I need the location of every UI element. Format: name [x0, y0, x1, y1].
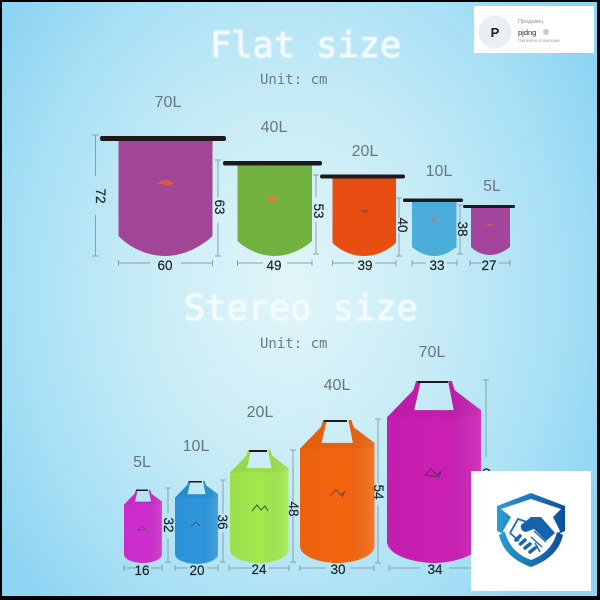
- title: stereo size: Stereo size: [184, 288, 418, 329]
- flat bag 40L: 40L: [261, 119, 287, 136]
- flat bag 10L: 10L: [426, 163, 452, 180]
- flat bag 5L: [455, 178, 515, 273]
- flat bag 10L: [395, 163, 463, 273]
- stereo bag 10L: 36: [215, 514, 230, 530]
- flat bag 10L: 33: [429, 258, 445, 273]
- flat bag 20L: 39: [357, 258, 373, 273]
- stereo bag 5L: 5L: [133, 454, 151, 471]
- badge avatar: P: [491, 25, 500, 40]
- badge text: Продавец: [518, 19, 544, 25]
- flat bag 70L: 70L: [155, 94, 181, 111]
- unit: flat: Unit: cm: [260, 72, 327, 88]
- left hand outline: [510, 519, 527, 541]
- stereo bag 40L: 40L: [324, 377, 350, 394]
- stereo bag 10L: 10L: [183, 438, 209, 455]
- flat bag 40L: 63: [212, 199, 227, 215]
- stereo bag 5L: 16: [134, 563, 150, 578]
- icon: handshake shield: [497, 493, 565, 567]
- stereo bag 20L: 20L: [247, 404, 273, 421]
- badge text: pjdng: [518, 28, 536, 37]
- flat bag 10L: 40: [395, 217, 410, 233]
- flat bag 70L: [92, 94, 226, 273]
- flat bag 5L: 5L: [483, 178, 501, 195]
- stereo bag 70L: 70L: [419, 344, 445, 361]
- stereo bag 20L: 24: [251, 562, 267, 577]
- flat bag 20L: 53: [311, 203, 326, 219]
- stereo bag 70L: [387, 344, 490, 577]
- title: flat size: Flat size: [210, 25, 401, 66]
- stereo bag 10L: 20: [189, 563, 205, 578]
- seller badge: [474, 6, 594, 53]
- badge text: Перейти в магазин: [518, 37, 560, 44]
- stereo bag 10L: [175, 438, 230, 578]
- stereo bag 70L: 34: [427, 562, 443, 577]
- flat bag 70L: 72: [93, 188, 108, 204]
- unit: stereo: Unit: cm: [260, 336, 327, 352]
- stereo bag 40L: [300, 377, 386, 577]
- right hand: [521, 517, 555, 541]
- flat bag 40L: [212, 119, 322, 273]
- badge text: [518, 19, 560, 44]
- flat bag 20L: [311, 143, 405, 273]
- fingers: [516, 536, 535, 552]
- trust logo panel: [471, 471, 591, 591]
- stereo bag 40L: 30: [330, 562, 346, 577]
- stereo bag 20L: [229, 404, 301, 577]
- flat bag 20L: 20L: [352, 143, 378, 160]
- flat bag 5L: 38: [455, 221, 470, 237]
- flat bag 5L: 27: [481, 258, 497, 273]
- flat bag 40L: 49: [266, 258, 282, 273]
- flat bag 70L: 60: [157, 258, 173, 273]
- stereo bag 5L: 32: [161, 517, 176, 533]
- stereo bag 5L: [124, 454, 176, 578]
- stereo bag 40L: 54: [371, 484, 386, 500]
- stereo bag 20L: 48: [286, 501, 301, 517]
